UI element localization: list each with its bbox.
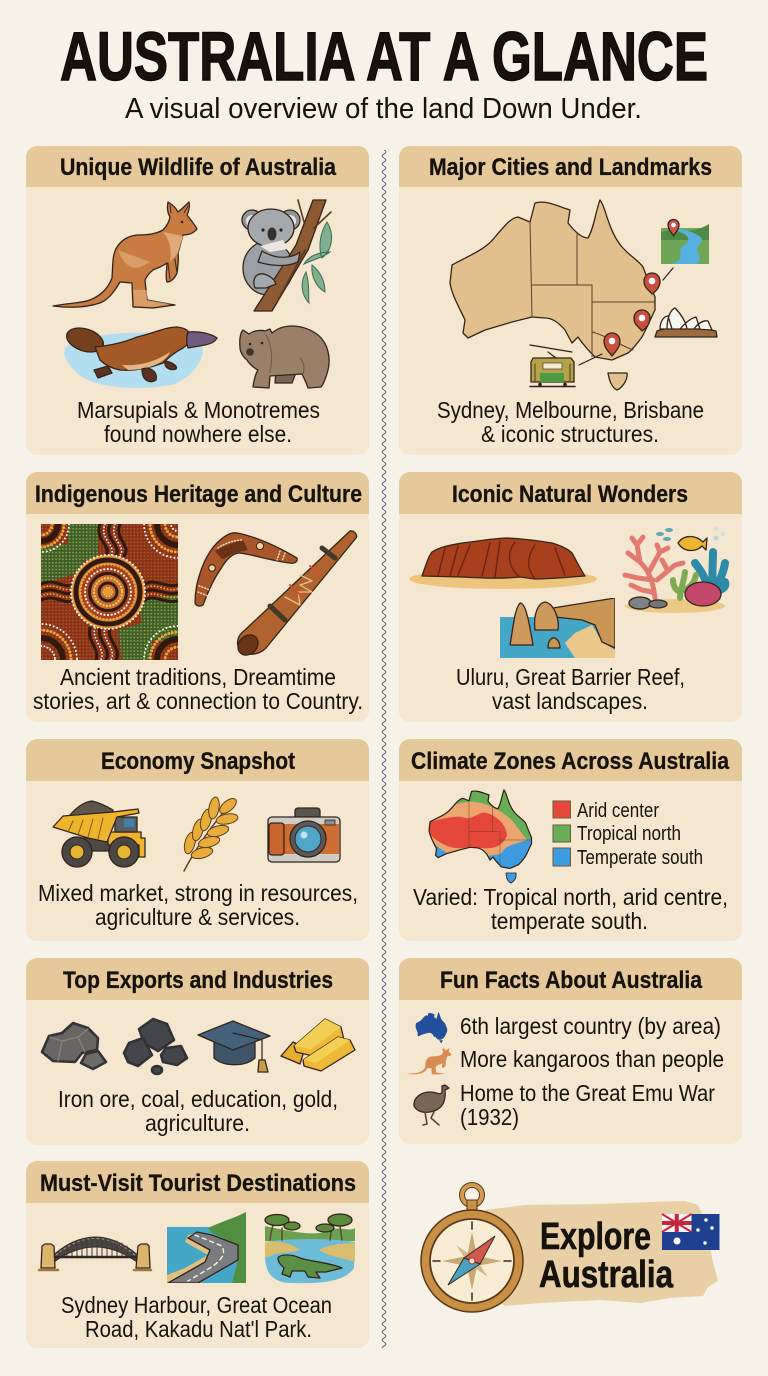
icon: koala on branch	[242, 200, 332, 311]
heading: unique wildlife: Unique Wildlife of Australia	[60, 154, 337, 181]
icon: wheat	[182, 796, 239, 871]
icon: blue Australia	[416, 1013, 447, 1044]
compass	[421, 1185, 523, 1312]
heading: climate zones: Climate Zones Across Australia	[411, 748, 730, 775]
icon: coral reef	[625, 527, 725, 613]
caption: climate zones	[413, 884, 728, 934]
caption: economy: Mixed market, strong in resources,	[38, 880, 358, 906]
pin: Melbourne	[604, 333, 620, 356]
icon: coal	[124, 1019, 187, 1074]
heading: tourist destinations: Must-Visit Tourist Destinations	[40, 1170, 356, 1197]
wavy centre divider	[380, 150, 388, 1348]
explore text	[539, 1216, 674, 1296]
fact: kangaroos: More kangaroos than people	[460, 1046, 724, 1072]
panel: fun facts	[399, 958, 742, 1144]
caption: indigenous heritage: stories, art & connection to Country.	[33, 688, 363, 714]
heading: indigenous heritage: Indigenous Heritage and Culture	[35, 481, 362, 508]
icon: emu	[414, 1085, 449, 1125]
icon: small kangaroo	[407, 1048, 452, 1074]
panel: natural wonders	[399, 472, 742, 722]
icon: iron ore	[42, 1023, 106, 1069]
pin line: tram	[579, 354, 602, 365]
icon: boomerang	[195, 533, 297, 606]
caption: top exports: Iron ore, coal, education, gold,	[58, 1086, 338, 1112]
icon: river scene with pin	[661, 220, 709, 264]
caption: unique wildlife: found nowhere else.	[104, 421, 292, 447]
brush stroke	[485, 1201, 718, 1306]
caption: major cities	[437, 397, 704, 447]
caption: indigenous heritage	[33, 664, 363, 714]
caption: natural wonders	[456, 664, 685, 714]
fact: emu war: (1932)	[460, 1104, 519, 1130]
legend: arid: Arid center	[577, 800, 659, 822]
climate map	[426, 788, 534, 883]
icon: mining truck	[53, 801, 145, 867]
explore text: Explore	[540, 1216, 651, 1258]
fact: emu war: Home to the Great Emu War	[460, 1080, 715, 1106]
heading: natural wonders: Iconic Natural Wonders	[452, 481, 688, 508]
icon: Uluru	[409, 538, 597, 589]
icon: kangaroo	[53, 202, 197, 308]
panel: tourist destinations	[26, 1161, 369, 1348]
pin line: river	[663, 268, 673, 280]
icon: camera	[268, 808, 340, 862]
caption: top exports	[58, 1086, 338, 1136]
icon: Kakadu crocodile	[265, 1214, 355, 1283]
caption: major cities: & iconic structures.	[481, 421, 659, 447]
subtitle: A visual overview of the land Down Under.	[125, 93, 642, 125]
caption: top exports: agriculture.	[145, 1110, 250, 1136]
icon: wombat	[240, 326, 329, 388]
icon: gold bars	[281, 1019, 355, 1071]
panel: unique wildlife	[26, 146, 369, 455]
explore text: Australia	[539, 1254, 674, 1296]
caption: major cities: Sydney, Melbourne, Brisbane	[437, 397, 704, 423]
caption: unique wildlife	[77, 397, 320, 447]
legend: temperate: Temperate south	[577, 847, 703, 869]
icon: Australian flag	[662, 1214, 720, 1250]
legend: arid	[553, 800, 659, 822]
pin: Brisbane	[644, 273, 660, 294]
panel: economy	[26, 739, 369, 941]
icon: graduation cap	[198, 1021, 270, 1072]
caption: climate zones: Varied: Tropical north, arid centre,	[413, 884, 728, 910]
caption: tourist destinations: Sydney Harbour, Great Ocean	[61, 1292, 332, 1318]
legend: tropical: Tropical north	[577, 823, 681, 845]
caption: indigenous heritage: Ancient traditions, Dreamtime	[60, 664, 336, 690]
panel: indigenous heritage	[5, 472, 369, 722]
icon: Sydney Harbour Bridge	[39, 1237, 151, 1270]
icon: didgeridoo	[234, 531, 357, 659]
fact: largest: 6th largest country (by area)	[460, 1013, 721, 1039]
fact: emu war	[460, 1080, 715, 1130]
caption: economy: agriculture & services.	[95, 904, 300, 930]
icon: opera house	[655, 308, 717, 337]
icon: tram	[530, 345, 575, 386]
panel: major cities	[399, 146, 742, 455]
map of Australia	[450, 200, 655, 390]
icon: platypus in water	[64, 324, 217, 388]
heading: major cities: Major Cities and Landmarks	[429, 154, 712, 181]
pin: Sydney	[634, 310, 650, 331]
caption: tourist destinations: Road, Kakadu Nat'l Park.	[85, 1316, 312, 1342]
dot painting	[41, 524, 178, 660]
caption: climate zones: temperate south.	[491, 908, 648, 934]
legend: climate	[553, 800, 703, 869]
panel: climate zones	[399, 739, 742, 941]
caption: natural wonders: Uluru, Great Barrier Reef,	[456, 664, 685, 690]
caption: economy	[38, 880, 358, 930]
icon: coastal rock stacks	[500, 598, 615, 658]
heading: top exports: Top Exports and Industries	[63, 967, 333, 994]
heading: fun facts: Fun Facts About Australia	[440, 967, 703, 994]
panel: top exports	[26, 958, 369, 1145]
caption: natural wonders: vast landscapes.	[492, 688, 648, 714]
heading: economy: Economy Snapshot	[101, 748, 295, 775]
caption: tourist destinations	[61, 1292, 332, 1342]
icon: Great Ocean Road	[167, 1212, 246, 1283]
explore badge	[421, 1185, 720, 1312]
caption: unique wildlife: Marsupials & Monotremes	[77, 397, 320, 423]
